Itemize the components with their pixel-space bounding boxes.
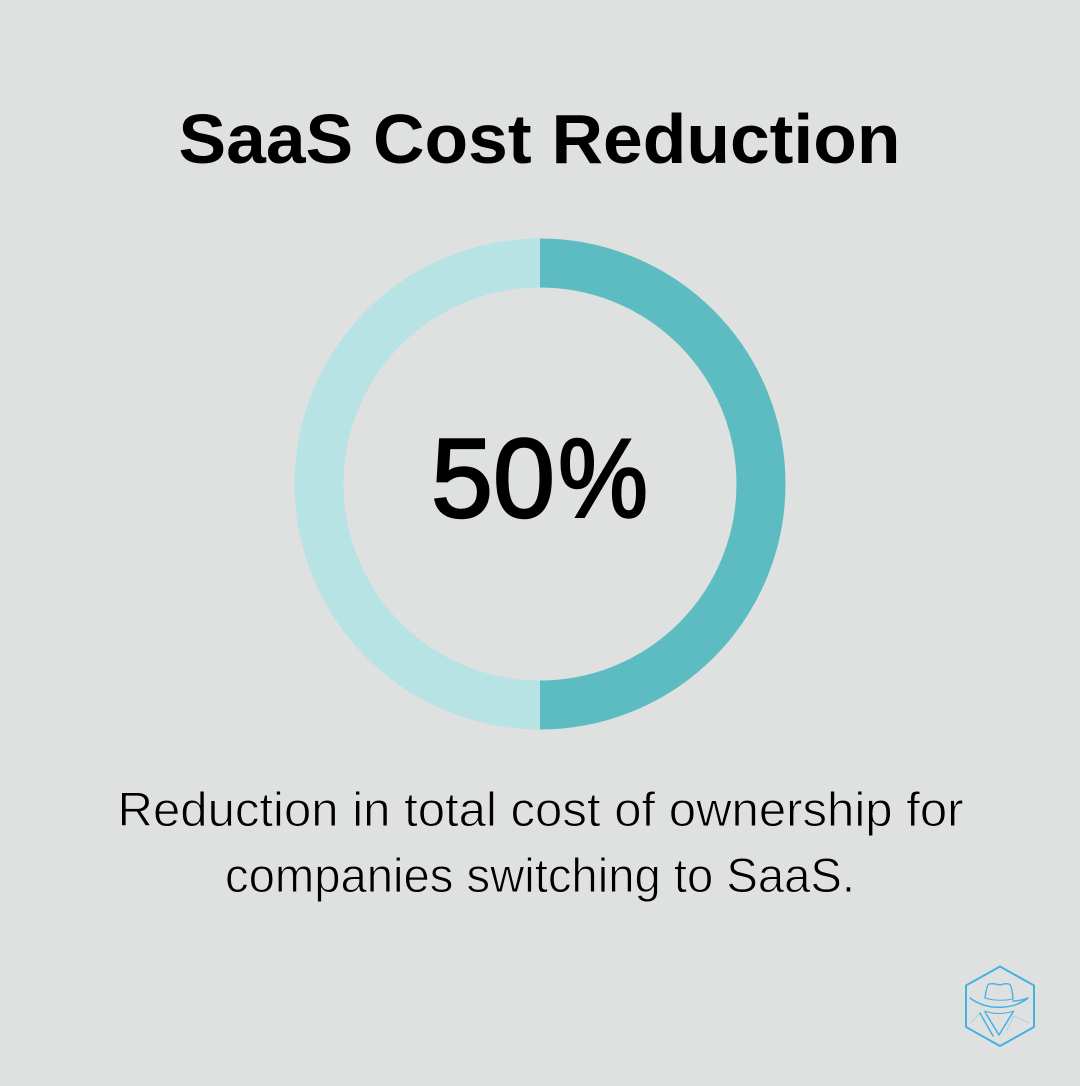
icon: hexagon spy logo: [966, 966, 1034, 1046]
title: SaaS Cost Reduction: [178, 100, 900, 178]
description text: [118, 784, 964, 903]
donut chart: 50%: [319, 263, 761, 705]
description text: Reduction in total cost of ownership for: [118, 784, 964, 837]
donut value: 50: [431, 416, 555, 541]
donut value: %: [558, 416, 648, 541]
description text: companies switching to SaaS.: [225, 850, 855, 903]
